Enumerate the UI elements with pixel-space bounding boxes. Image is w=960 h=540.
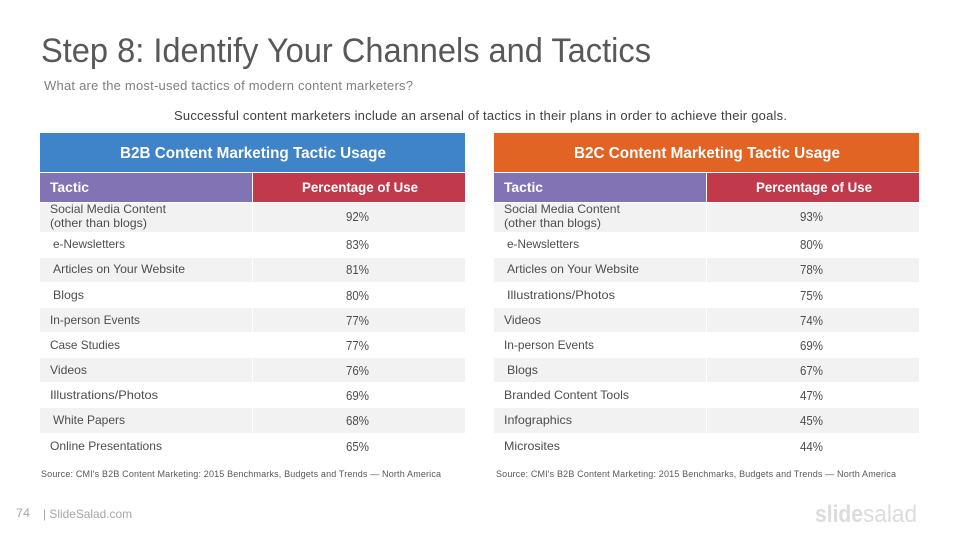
B2C percentages: 78% <box>800 263 823 277</box>
page number: 74 <box>16 506 30 520</box>
B2C tactic names: In-person Events <box>504 338 594 352</box>
panel: B2B table <box>40 133 465 454</box>
B2B column headers <box>40 173 465 202</box>
title: Step 8: Identify Your Channels and Tactics <box>41 32 651 70</box>
B2B tactic names: Online Presentations <box>50 439 162 453</box>
B2C tactic names: Branded Content Tools <box>504 388 629 402</box>
B2C percentages: 47% <box>800 389 823 403</box>
B2C tactic names: e-Newsletters <box>507 237 579 251</box>
B2B tactic names: Blogs <box>53 288 84 302</box>
B2B tactic names: White Papers <box>53 413 125 427</box>
logo: slidesalad <box>815 501 917 528</box>
B2C row backgrounds <box>494 203 919 433</box>
B2B percentages: 77% <box>346 314 369 328</box>
B2B tactic names: Case Studies <box>50 338 120 352</box>
B2B percentages: 81% <box>346 263 369 277</box>
footer site name: | SlideSalad.com <box>43 507 132 521</box>
B2B column headers: Tactic <box>50 179 89 195</box>
B2C table banner <box>494 133 919 172</box>
B2C column headers: Percentage of Use <box>756 179 872 195</box>
B2C tactic names <box>504 202 639 453</box>
B2C source note: Source: CMI's B2B Content Marketing: 2015 Benchmarks, Budgets and Trends — North America <box>496 469 896 479</box>
B2C percentages: 93% <box>800 210 823 224</box>
B2C percentages: 44% <box>800 440 823 454</box>
B2B percentages: 80% <box>346 289 369 303</box>
B2C tactic names: Blogs <box>507 363 538 377</box>
B2C tactic names: Social Media Content <box>504 202 621 216</box>
B2B source note: Source: CMI's B2B Content Marketing: 2015 Benchmarks, Budgets and Trends — North America <box>41 469 441 479</box>
B2C percentages: 45% <box>800 414 823 428</box>
B2B percentages: 92% <box>346 210 369 224</box>
B2B percentages: 77% <box>346 339 369 353</box>
B2C percentages: 69% <box>800 339 823 353</box>
B2B tactic names <box>50 202 185 453</box>
B2C percentages: 67% <box>800 364 823 378</box>
B2B percentages: 76% <box>346 364 369 378</box>
B2B tactic names: Social Media Content <box>50 202 167 216</box>
B2C column headers <box>494 173 919 202</box>
B2B tactic names: e-Newsletters <box>53 237 125 251</box>
B2B percentages: 68% <box>346 414 369 428</box>
subtitle: What are the most-used tactics of modern content marketers? <box>44 78 413 93</box>
B2B table banner <box>40 133 465 172</box>
intro sentence: Successful content marketers include an arsenal of tactics in their plans in order to achieve their goals. <box>174 108 787 123</box>
B2B percentages: 69% <box>346 389 369 403</box>
B2C percentages: 80% <box>800 238 823 252</box>
B2B tactic names: (other than blogs) <box>50 216 147 230</box>
B2B table banner: B2B Content Marketing Tactic Usage <box>120 145 386 162</box>
B2C table banner: B2C Content Marketing Tactic Usage <box>574 145 840 162</box>
B2C column headers: Tactic <box>504 179 543 195</box>
logo: slidesalad: slide <box>815 501 863 528</box>
B2C tactic names: Articles on Your Website <box>507 262 639 276</box>
B2C tactic names: Illustrations/Photos <box>507 288 615 302</box>
B2B tactic names: Videos <box>50 363 87 377</box>
B2C percentages: 74% <box>800 314 823 328</box>
B2B percentages: 83% <box>346 238 369 252</box>
B2B column headers: Percentage of Use <box>302 179 418 195</box>
B2C tactic names: Microsites <box>504 439 560 453</box>
B2C percentages <box>800 210 823 454</box>
B2B row backgrounds <box>40 203 465 433</box>
B2C tactic names: Videos <box>504 313 541 327</box>
B2B percentages <box>346 210 369 454</box>
B2C tactic names: Infographics <box>504 413 572 427</box>
B2B percentages: 65% <box>346 440 369 454</box>
B2C tactic names: (other than blogs) <box>504 216 601 230</box>
logo: slidesalad: salad <box>863 501 917 528</box>
B2B tactic names: Illustrations/Photos <box>50 388 158 402</box>
B2B tactic names: Articles on Your Website <box>53 262 185 276</box>
B2B tactic names: In-person Events <box>50 313 140 327</box>
B2C percentages: 75% <box>800 289 823 303</box>
panel: B2C table <box>494 133 919 454</box>
